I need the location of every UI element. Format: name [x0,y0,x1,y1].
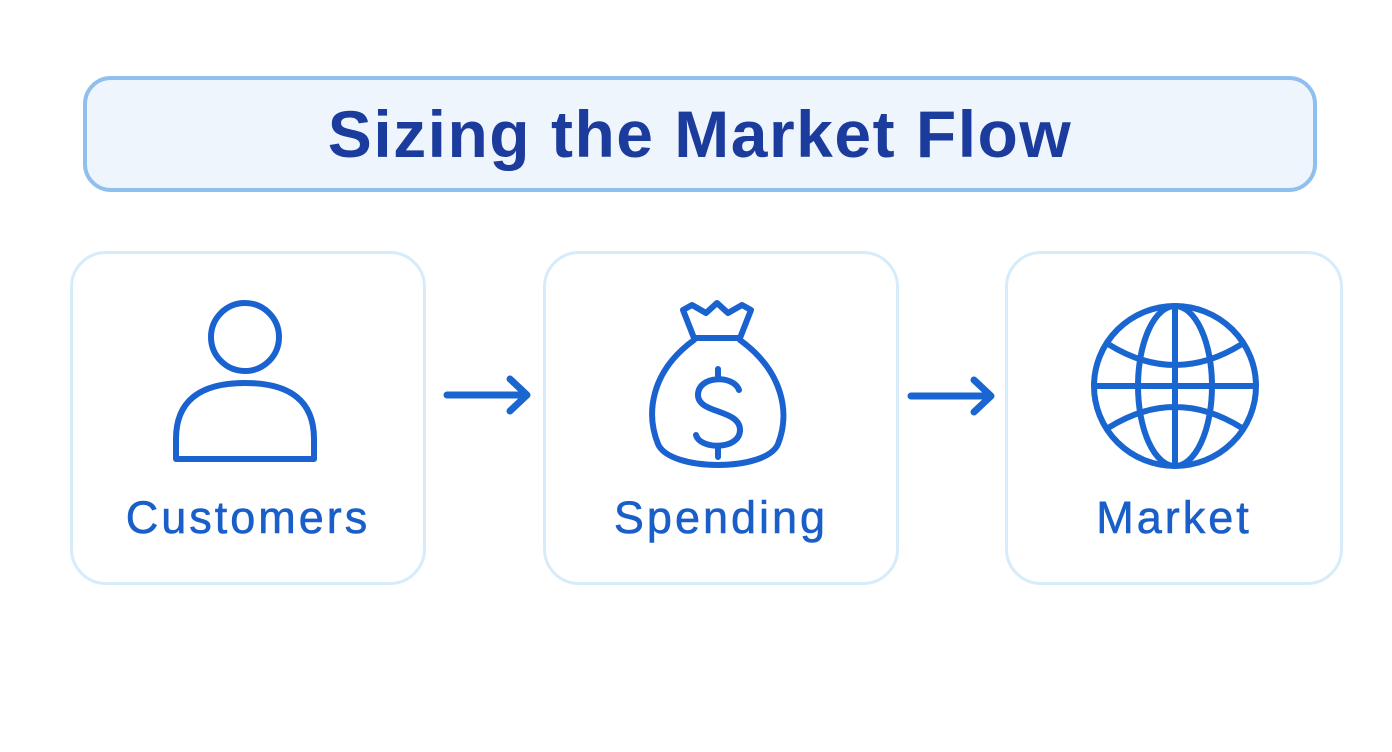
icon: money bag [649,300,786,468]
panel: market [1005,251,1343,585]
title: Sizing the Market Flow [328,97,1072,171]
arrow 2 [908,376,994,416]
arrow 1 [444,376,530,414]
title [83,76,1317,192]
label: Spending [614,492,828,543]
label: Customers [126,492,370,543]
icon: person [173,300,317,462]
label: Market [1096,492,1252,543]
panel: spending [543,251,899,585]
panel: customers [70,251,426,585]
icon: globe [1091,303,1259,469]
